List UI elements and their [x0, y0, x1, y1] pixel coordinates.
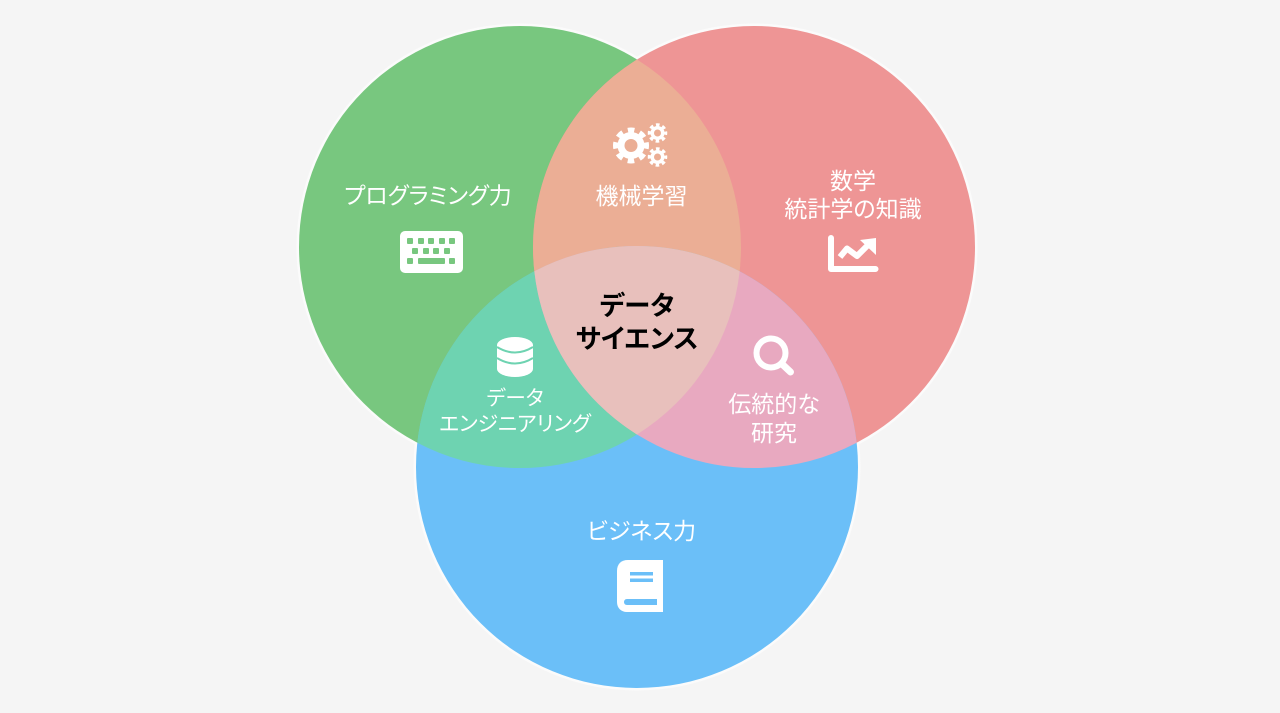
label: mathematics and statistics	[784, 168, 922, 222]
label: data engineering: エンジニアリング	[439, 413, 592, 436]
icon: line chart	[831, 238, 876, 269]
label: data engineering: データ	[486, 387, 544, 410]
label: traditional research: 伝統的な	[728, 391, 820, 417]
icon: keyboard	[400, 231, 463, 273]
overlap: machine learning	[533, 60, 741, 272]
circle: business	[416, 246, 858, 688]
Venn diagram infographic	[299, 26, 975, 688]
label: mathematics and statistics: 統計学の知識	[784, 196, 922, 222]
label: data science: データ	[600, 291, 674, 321]
label: programming: プログラミング力	[344, 182, 512, 208]
circle outlines	[296, 24, 978, 690]
overlap: data engineering	[417, 246, 740, 468]
overlap: traditional research	[534, 246, 857, 468]
overlap: data science center	[534, 246, 740, 434]
label: data engineering	[439, 387, 592, 436]
label: mathematics and statistics: 数学	[830, 168, 876, 194]
label: data science	[576, 291, 698, 354]
icon: gears	[616, 125, 666, 165]
icon: magnifier	[756, 338, 790, 372]
label: business: ビジネス力	[587, 518, 696, 544]
circle: programming	[299, 26, 741, 468]
circle: mathematics and statistics	[533, 26, 975, 468]
icon: book	[617, 560, 663, 612]
label: data science: サイエンス	[576, 324, 698, 354]
label: traditional research: 研究	[751, 420, 797, 446]
icon: database	[497, 337, 533, 377]
label: traditional research	[728, 391, 820, 446]
label: machine learning: 機械学習	[596, 183, 688, 209]
